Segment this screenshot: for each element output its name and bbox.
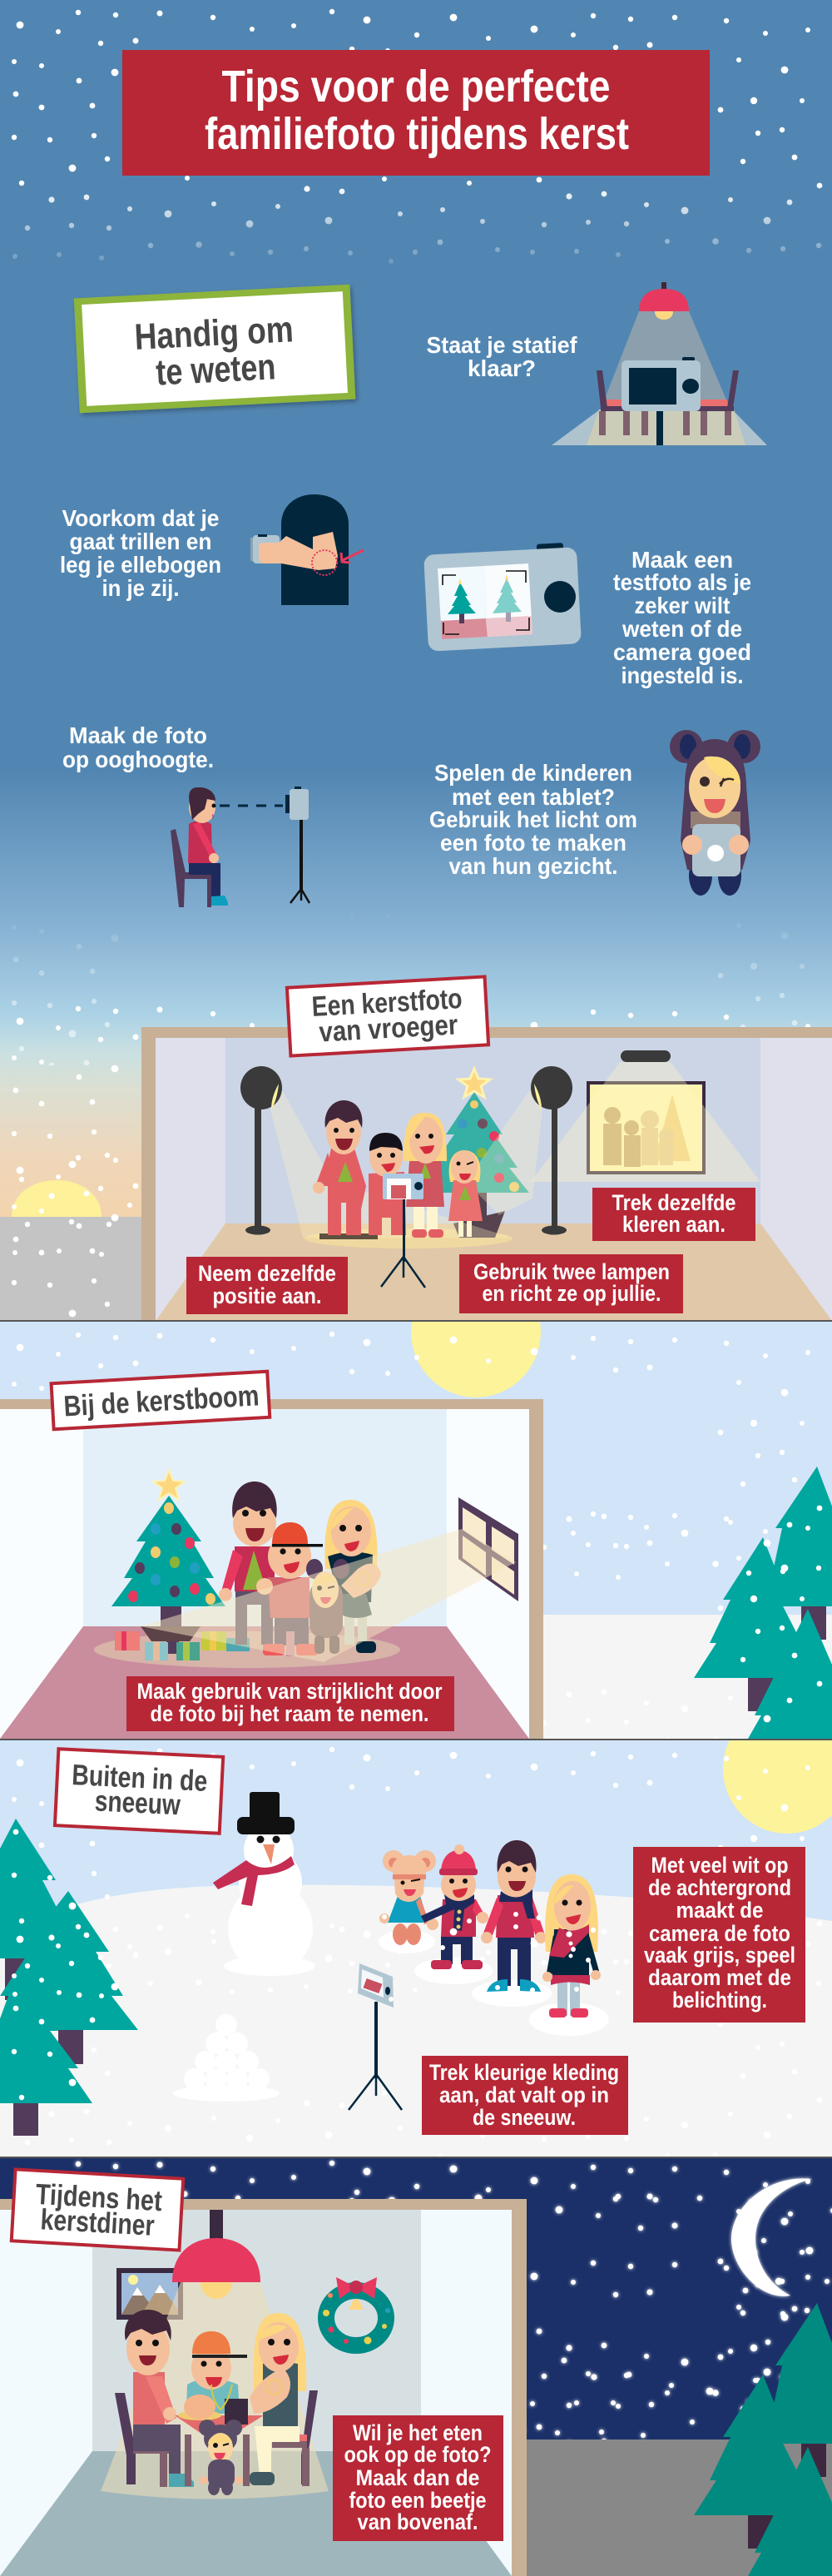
callout: Trek dezelfde kleren aan: kleren aan. [622,1212,726,1237]
callout: Wil je het eten: van bovenaf. [358,2509,478,2534]
sun at the horizon [12,1180,102,1217]
icon: elbow against body [250,494,364,605]
snow around the studio [12,1005,822,1409]
falling snow [12,1747,822,2178]
crescent moon [731,2178,812,2296]
icon: camera on tripod at the dinner table [552,282,767,445]
night sky [0,2158,832,2440]
tip: testfoto: ingesteld is. [621,663,744,688]
title: familiefoto tijdens kerst [205,109,629,159]
callout: Gebruik twee lampen: Gebruik twee lampen [473,1259,670,1284]
heading: Handig om te weten [74,285,355,413]
callout: strijklicht: de foto bij het raam te nemen. [150,1701,429,1726]
outside ground [527,2440,832,2576]
right floor lamp [466,1066,572,1235]
tip: testfoto: zeker wilt [634,593,730,618]
heading: Een kerstfoto van vroeger: Een kerstfoto [311,983,463,1023]
snow fading in above the studio [12,924,805,1065]
back wall [92,2210,421,2451]
room frame [0,2199,527,2576]
heading: Buiten in de sneeuw: sneeuw [94,1784,181,1821]
wreath with bow and bell [323,2277,390,2345]
snow at the top [12,9,822,264]
room frame [0,1399,543,1739]
callout: strijklicht: Maak gebruik van strijklicht door [136,1679,443,1704]
pine trees right [694,2303,832,2576]
person: mother [404,1113,447,1238]
person: son [369,1133,406,1236]
camera on tripod [381,1174,425,1288]
person: child with bear hat [379,1850,436,1945]
tip: ellebogen: leg je ellebogen [60,552,221,578]
left floor lamp [240,1066,512,1238]
floor [156,1223,832,1321]
callout: Met veel wit: vaak grijs, speel [644,1943,795,1968]
tip: ooghoogte [62,722,214,772]
divider line [0,1320,832,1322]
title: Tips voor de perfecte [221,62,611,112]
divider line [0,1739,832,1740]
sunlight beam [141,1529,516,1662]
tip: statief [426,332,577,381]
stars [73,2158,832,2440]
callout: Trek kleurige kleding: de sneeuw. [473,2105,576,2130]
table with turkey and candles [175,2385,264,2486]
tip: testfoto: testfoto als je [613,569,751,595]
callout: Neem dezelfde positie aan [186,1257,348,1314]
tip: tablet [429,760,637,879]
tip: testfoto: weten of de [622,616,742,642]
heading: Een kerstfoto van vroeger: van vroeger [318,1009,458,1049]
window with sunlight [458,1497,518,1601]
side walls [0,1409,529,1739]
heading: Tijdens het kerstdiner: Tijdens het [35,2178,163,2217]
tip: statief: klaar? [468,355,536,381]
glow on floor [305,1228,513,1248]
callout: strijklicht [126,1676,454,1731]
snow hill [0,1885,832,2157]
tip: testfoto [613,547,751,688]
tip: statief: Staat je statief [426,332,577,358]
panel: bij de kerstboom [0,1322,832,1739]
snow mounds [379,1930,609,2036]
callout: Neem dezelfde positie aan: Neem dezelfde [198,1261,336,1286]
callout: Met veel wit [633,1847,805,2023]
back wall [83,1409,447,1626]
callout: Wil je het eten: foto een beetje [349,2488,486,2513]
callout: Met veel wit: de achtergrond [648,1875,791,1900]
lamp light [101,2282,329,2499]
panel: buiten in de sneeuw [0,1740,832,2157]
callout: Gebruik twee lampen [459,1254,683,1313]
snowman [213,1792,315,1976]
left chair [115,2393,171,2487]
room frame [141,1027,832,1321]
heading: Handig om te weten: Handig om [133,309,295,358]
snowball pile [173,2014,280,2102]
icon: child in bear suit with tablet [670,730,760,896]
snowy ground [543,1615,832,1739]
falling snow [12,1332,822,1762]
person: father [481,1840,547,1992]
tip: ellebogen [60,505,221,601]
tip: ooghoogte: Maak de foto [69,722,207,748]
person: son with cap [186,2331,247,2414]
callout: Trek kleurige kleding [422,2056,628,2135]
tip: tablet: Gebruik het licht om [429,807,637,832]
panel: studio scene (een kerstfoto van vroeger) [141,1027,832,1321]
framed mountain picture [116,2268,183,2320]
heading: Buiten in de sneeuw [55,1749,223,1834]
tip: ellebogen: in je zij. [102,575,180,601]
callout: Met veel wit: daarom met de [648,1965,791,1990]
christmas tree [419,1069,529,1238]
callout: Neem dezelfde positie aan: positie aan. [213,1283,321,1308]
framed picture [587,1081,706,1174]
panel: tijdens het kerstdiner [0,2158,832,2576]
heading: Bij de kerstboom: Bij de kerstboom [63,1379,260,1422]
person: daughter [448,1150,483,1237]
person: boy with red hat [421,1844,488,1969]
tip: ellebogen: gaat trillen en [70,529,211,554]
tip: tablet: Spelen de kinderen [434,760,632,786]
tip: testfoto: camera goed [613,639,751,665]
callout: Trek kleurige kleding: Trek kleurige kleding [429,2060,619,2085]
tip: testfoto: Maak een [631,547,733,573]
phone on tripod [349,1963,402,2110]
pine trees right [694,1467,832,1739]
tip: tablet: met een tablet? [452,784,615,810]
walls [156,1038,832,1321]
person: child in bear suit [306,1559,349,1654]
callout: Trek dezelfde kleren aan [592,1188,755,1241]
pendant lamp [172,2210,260,2299]
person: mother with baby [250,2313,306,2485]
heading: Buiten in de sneeuw: Buiten in de [71,1759,208,1798]
tip: ellebogen: Voorkom dat je [62,505,220,531]
heading: Een kerstfoto van vroeger [287,976,488,1056]
christmas tree with presents [111,1470,226,1660]
heading: Tijdens het kerstdiner [12,2169,183,2251]
right chair [272,2390,318,2486]
tip: tablet: van hun gezicht. [449,853,617,879]
person: mother [542,1874,601,2018]
callout: Met veel wit: maakt de [676,1898,764,1923]
callout: Wil je het eten: ook op de foto? [344,2442,491,2467]
callout: Met veel wit: Met veel wit op [651,1853,789,1878]
rug [94,1631,400,1668]
icon: seated person at eye level with camera [171,787,310,907]
callout: Met veel wit: camera de foto [649,1921,790,1946]
callout: Wil je het eten: Maak dan de [356,2465,479,2490]
callout: Trek kleurige kleding: aan, dat valt op in [439,2082,609,2107]
title [122,50,710,176]
divider line [0,2157,832,2158]
sky [0,1322,832,1615]
heading: Bij de kerstboom [52,1372,270,1429]
person: child in bear suit [199,2420,243,2495]
floor [0,1626,529,1739]
grey ground [0,1217,141,1321]
sun [723,1740,832,1834]
heading: Handig om te weten: te weten [155,346,276,394]
person: father [313,1100,378,1239]
tip: ooghoogte: op ooghoogte. [62,747,214,772]
heading: Tijdens het kerstdiner: kerstdiner [40,2203,156,2242]
callout: Wil je het eten: Wil je het eten [353,2420,483,2445]
callout: Wil je het eten [333,2415,503,2541]
floor [0,2451,512,2576]
person: mother with baby [324,1500,381,1653]
icon: camera with test photo [423,543,582,652]
ceiling spot [531,1050,760,1182]
side walls [0,2210,512,2576]
sun [411,1322,541,1397]
tip: tablet: een foto te maken [440,830,626,856]
person: son [256,1522,323,1656]
pine trees left [0,1819,138,2136]
callout: Trek dezelfde kleren aan: Trek dezelfde [612,1190,735,1215]
person: father [219,1482,277,1651]
panel: background and gradient sky [0,0,832,1323]
callout: Gebruik twee lampen: en richt ze op jullie. [483,1281,661,1306]
sky [0,1740,832,1921]
callout: Met veel wit: belichting. [672,1988,767,2013]
person: father [125,2310,194,2487]
